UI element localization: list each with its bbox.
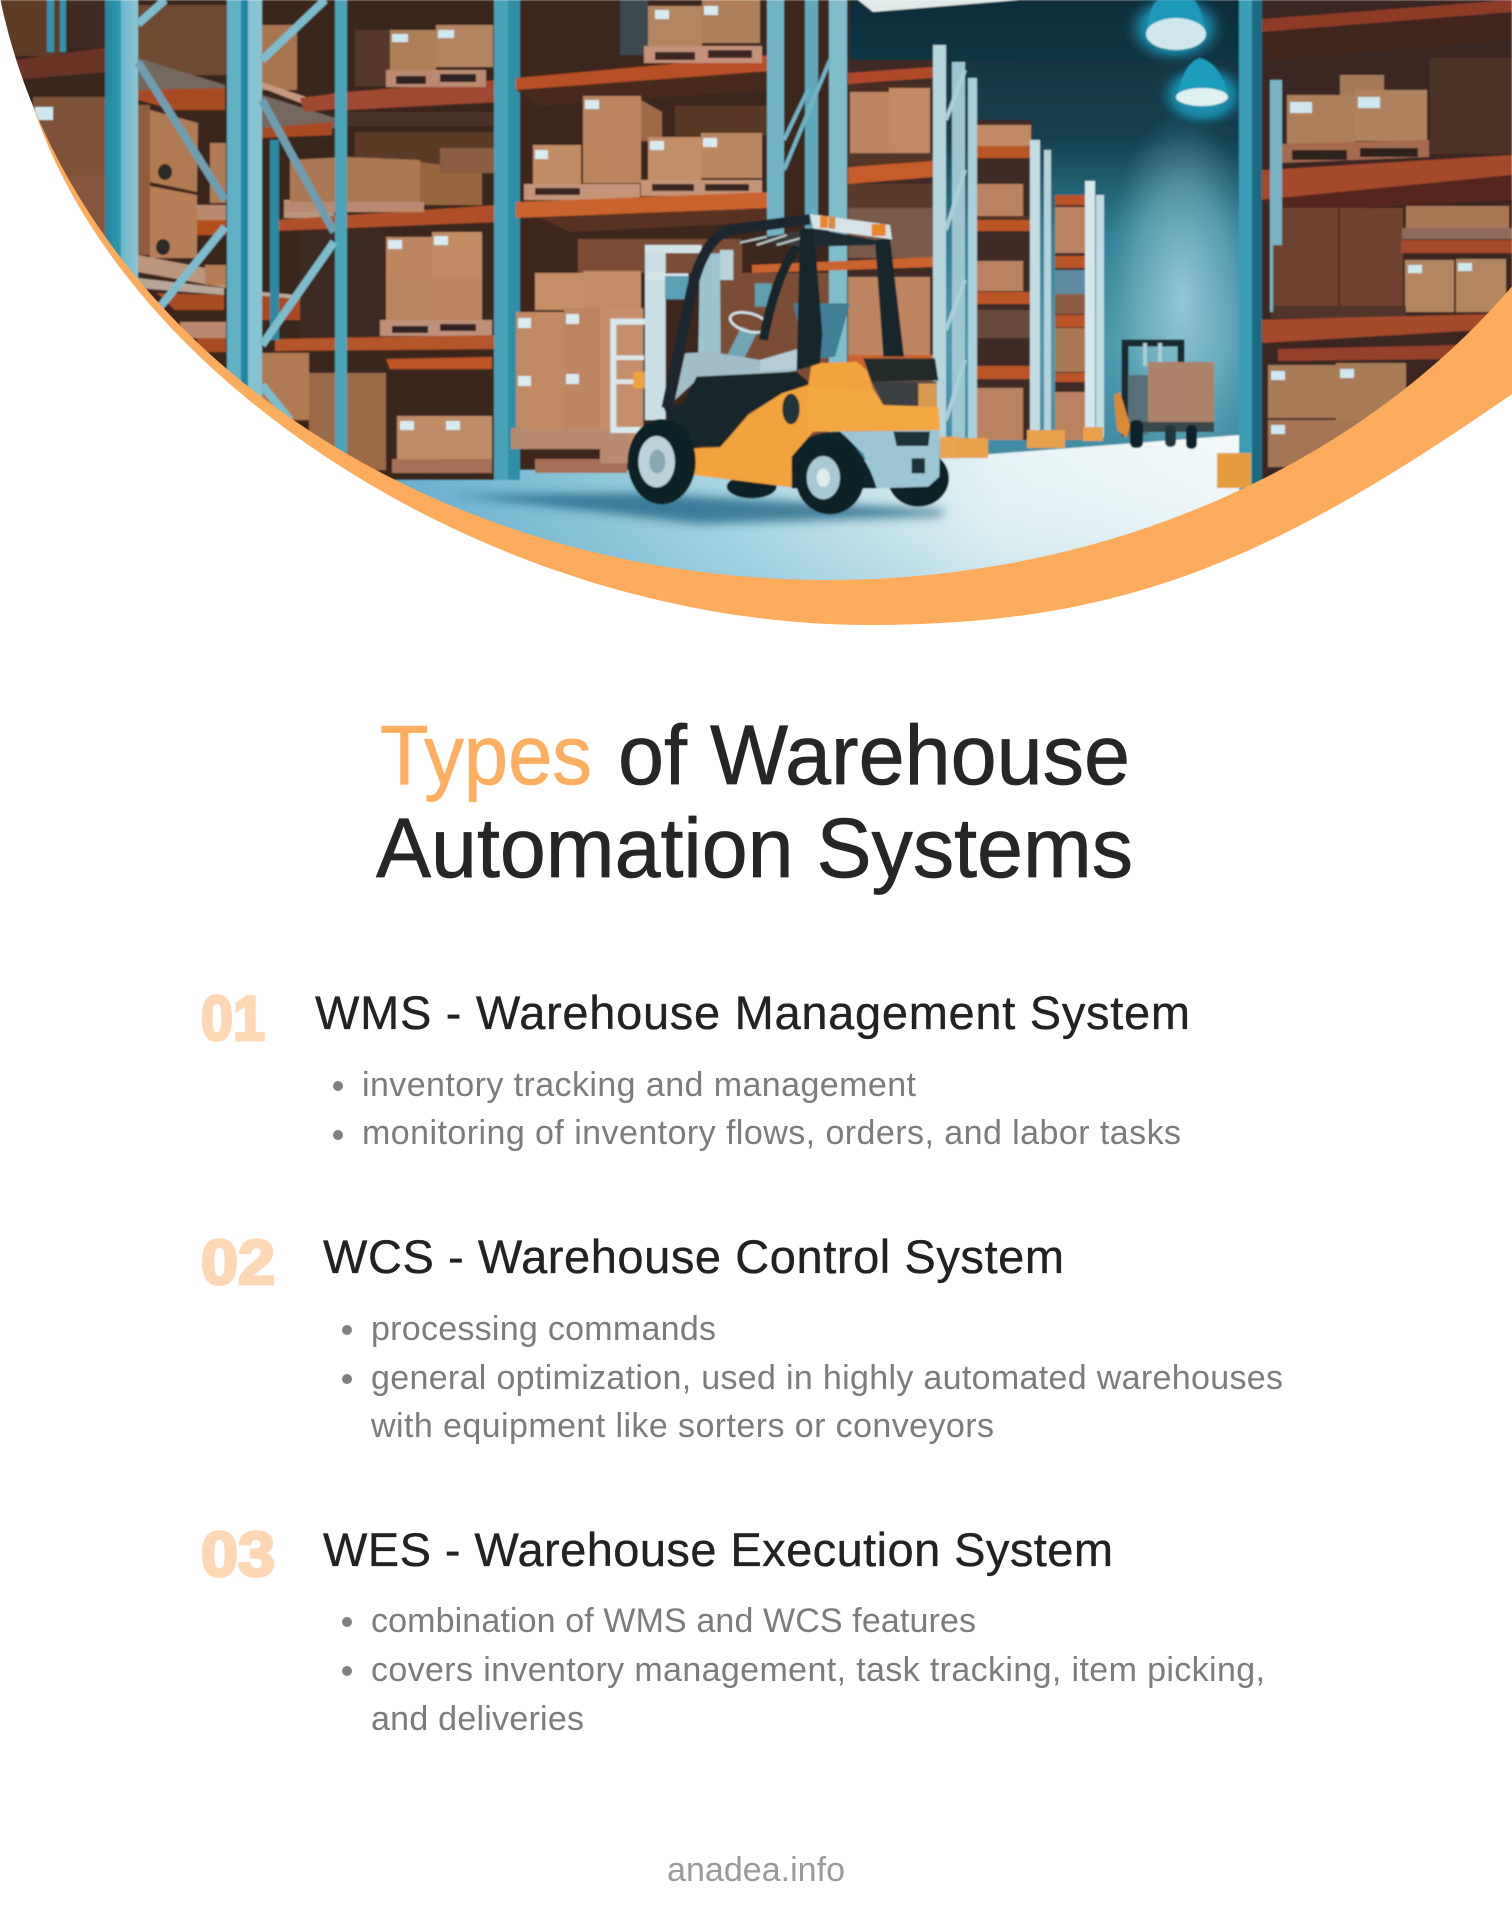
forklift: orange body	[693, 358, 940, 487]
number 02: 02	[201, 1228, 275, 1298]
bullets WES: and deliveries	[371, 1700, 584, 1738]
section 03: WES	[201, 1520, 1265, 1738]
distant forklift	[1114, 343, 1214, 449]
back wall and ceiling	[849, 0, 1240, 460]
title: of Warehouse	[618, 708, 1130, 802]
title	[376, 708, 1133, 895]
forklift: rear wheel far side	[727, 437, 958, 507]
heading WES: WES - Warehouse Execution System	[323, 1523, 1113, 1576]
number 03: 03	[201, 1520, 275, 1590]
hero photo: warehouse interior	[0, 0, 1512, 640]
floor	[393, 434, 1264, 580]
bullets WMS: monitoring of inventory flows, orders, and labor tasks	[362, 1114, 1181, 1152]
bullets WCS	[342, 1310, 1283, 1445]
forklift: rear grey panel	[792, 430, 940, 488]
left racks	[0, 0, 520, 480]
heading WMS: WMS - Warehouse Management System	[315, 986, 1190, 1039]
bullets WCS: general optimization, used in highly automated warehouses	[371, 1359, 1283, 1397]
bullets WES	[342, 1602, 1265, 1738]
bullets WES: combination of WMS and WCS features	[371, 1602, 976, 1640]
title: Types	[380, 708, 592, 802]
forklift: cargo guard and mast	[600, 245, 772, 463]
section 02: WCS	[201, 1228, 1283, 1445]
forklift: chassis	[663, 372, 810, 447]
number 01: 01	[201, 984, 265, 1054]
forklift: overhead guard	[667, 214, 904, 408]
right-of-forklift aisle racks	[752, 45, 1104, 458]
left rack uprights and bracing	[105, 0, 520, 480]
footer: anadea.info: anadea.info	[667, 1851, 845, 1889]
bullets WCS: with equipment like sorters or conveyors	[370, 1407, 994, 1445]
middle rack	[511, 0, 850, 473]
forklift: wheels	[628, 419, 864, 514]
orange crescent band	[31, 100, 1512, 625]
right foreground rack	[1217, 0, 1512, 490]
title: Automation Systems	[376, 801, 1133, 895]
bullets WES: covers inventory management, task tracking, item picking,	[371, 1651, 1265, 1689]
bullets WMS: inventory tracking and management	[362, 1066, 917, 1104]
ceiling lamps	[1126, 0, 1239, 126]
bullets WMS	[333, 1066, 1181, 1152]
bullets WCS: processing commands	[371, 1310, 716, 1348]
section 01: WMS	[201, 984, 1190, 1152]
heading WCS: WCS - Warehouse Control System	[323, 1230, 1064, 1283]
forklift: seat, steering and dash	[675, 303, 850, 400]
forklift	[600, 214, 958, 514]
